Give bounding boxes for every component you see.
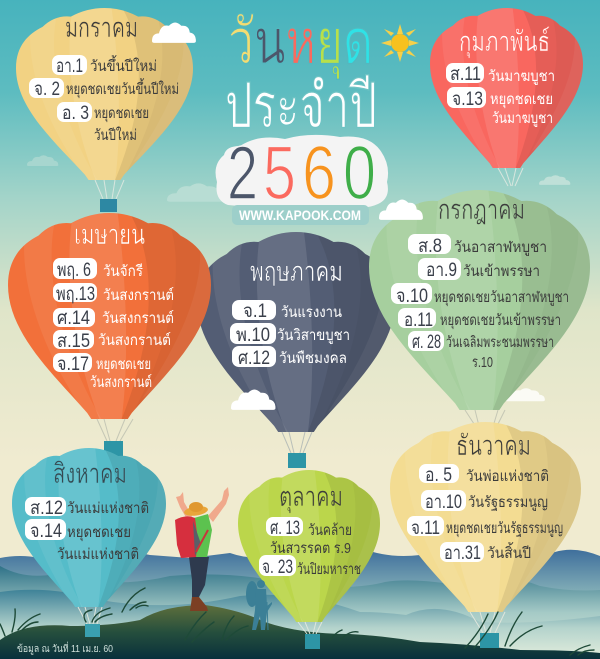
entry: 9 Jul: วันเข้าพรรษา	[463, 263, 540, 280]
ground hill	[0, 605, 600, 659]
entry: 15 Apr: วันสงกรานต์	[98, 332, 171, 349]
mountains	[0, 550, 600, 659]
entry: 10 May: วันวิสาขบูชา	[277, 327, 350, 344]
title	[216, 8, 419, 225]
entry: 8 Jul	[408, 234, 547, 257]
entry: 15 Apr: ส.15	[57, 331, 90, 352]
hat	[183, 505, 209, 517]
entry: 1 Jan: วันขึ้นปีใหม่	[90, 55, 157, 75]
entry: 8 Jul: ส.8	[418, 236, 442, 257]
entry: 1 May: วันแรงงาน	[281, 304, 342, 321]
entry: 11 Feb	[446, 63, 555, 85]
entry: 13 Oct: วันคล้าย	[308, 522, 352, 539]
year digits: 6	[302, 131, 336, 216]
entry: 31 Dec: อา.31	[444, 543, 481, 564]
entry: 13 Apr: พฤ.13	[56, 284, 95, 305]
entry: 13 Feb: หยุดชดเชย	[490, 91, 553, 109]
entry: 14 Aug: วันแม่แห่งชาติ	[57, 546, 139, 563]
entry: 14 Apr: ศ.14	[57, 308, 90, 329]
entry: 23 Oct	[259, 555, 361, 578]
entry: 13 Oct: วันสวรรคต ร.9	[270, 540, 351, 557]
year cloud	[216, 135, 388, 209]
entry: 17 Apr: วันสงกรานต์	[90, 374, 152, 391]
entry: 14 Aug: หยุดชดเชย	[67, 524, 131, 542]
entry: 10 May: พ.10	[236, 325, 270, 346]
heading: สิงหาคม	[53, 458, 127, 489]
heading: กรกฎาคม	[438, 194, 525, 225]
grass tufts	[0, 588, 594, 655]
entry: 3 Jan	[57, 102, 149, 144]
entry: 5 Dec: วันพ่อแห่งชาติ	[466, 468, 549, 485]
small hiker silhouette	[246, 580, 272, 630]
entry: 13 Apr	[53, 283, 174, 305]
ropes and basket	[282, 432, 312, 468]
ropes and basket	[78, 607, 102, 637]
balloon: May	[197, 232, 415, 468]
ropes	[465, 410, 505, 430]
balloon envelope	[238, 470, 394, 622]
heading: มกราคม	[65, 12, 138, 43]
entry: 9 Jul	[418, 258, 540, 281]
entry: 12 Aug: วันแม่แห่งชาติ	[67, 500, 149, 517]
entry: 9 Jul: อา.9	[426, 260, 457, 281]
title line 2: ประจำปี	[225, 72, 377, 141]
entry: 13 Feb: จ.13	[452, 89, 483, 110]
entry: 13 Apr: วันสงกรานต์	[103, 287, 174, 304]
entry: 11 Dec: จ.11	[411, 518, 440, 539]
entry: 17 Apr: จ.17	[57, 354, 89, 375]
balloon envelope	[16, 8, 211, 180]
ropes and basket	[470, 612, 505, 648]
entry: 11 Jul	[398, 308, 561, 331]
heading: พฤษภาคม	[250, 256, 343, 287]
entry: 10 May	[230, 323, 350, 346]
ropes and basket	[97, 419, 133, 456]
entry: 1 Jan: อา.1	[56, 56, 83, 77]
entry: 10 Jul: จ.10	[396, 286, 428, 307]
legs	[189, 557, 209, 597]
cloud: on May balloon	[231, 389, 275, 410]
cloud: top left	[152, 22, 196, 43]
entry: 28 Jul	[408, 331, 554, 371]
entry: 17 Apr: หยุดชดเชย	[96, 356, 151, 374]
entry: 28 Jul: ร.10	[472, 354, 493, 371]
heading: ตุลาคม	[279, 481, 343, 514]
entry: 6 Apr: พฤ. 6	[57, 260, 91, 281]
balloon: January	[16, 8, 211, 212]
entry: 3 Jan: หยุดชดเชย	[94, 105, 149, 123]
entry: 2 Jan: หยุดชดเชยวันขึ้นปีใหม่	[66, 78, 179, 99]
balloon: October	[238, 470, 394, 649]
website badge	[232, 205, 369, 225]
entry: 11 Feb: วันมาฆบูชา	[488, 68, 555, 85]
heading: กุมภาพันธ์	[459, 26, 550, 59]
website badge: WWW.KAPOOK.COM	[239, 208, 361, 223]
hiker figure	[175, 487, 229, 611]
icon: sun	[381, 24, 419, 62]
entry: 1 Jan	[52, 55, 157, 77]
balloon envelope	[197, 232, 415, 432]
ropes and basket	[95, 180, 124, 212]
entry: 14 Aug: จ.14	[30, 521, 62, 542]
entry: 6 Apr	[53, 258, 143, 281]
entry: 5 Dec: อ. 5	[425, 465, 452, 486]
entry: 3 Jan: อ. 3	[62, 103, 89, 124]
entry: 8 Jul: วันอาสาฬหบูชา	[454, 239, 547, 256]
balloon: April	[8, 213, 231, 456]
balloon envelope	[12, 448, 181, 607]
faint clouds	[27, 155, 570, 401]
ropes	[498, 168, 523, 186]
entry: 13 Feb	[447, 87, 553, 127]
boots	[190, 597, 208, 611]
entry: 12 Aug	[25, 497, 149, 519]
arms	[176, 487, 229, 522]
balloon envelope	[8, 213, 231, 419]
entry: 10 Dec	[421, 490, 548, 513]
ropes and basket	[298, 622, 322, 649]
entry: 31 Dec: วันสิ้นปี	[487, 542, 531, 562]
entry: 12 May	[232, 346, 347, 369]
entry: 11 Jul: อ.11	[404, 310, 433, 331]
year digits	[227, 131, 376, 216]
entry: 15 Apr	[53, 330, 171, 352]
entry: 6 Apr: วันจักรี	[103, 263, 143, 280]
source note: ข้อมูล ณ วันที่ 11 เม.ย. 60	[17, 641, 113, 655]
year digits: 2	[227, 131, 258, 216]
entry: 11 Jul: หยุดชดเชยวันเข้าพรรษา	[440, 312, 561, 330]
entry: 14 Aug	[25, 519, 139, 563]
cloud: July left	[379, 199, 423, 220]
balloon envelope	[369, 190, 600, 410]
entry: 5 Dec	[419, 464, 549, 486]
entry: 31 Dec	[440, 542, 531, 564]
entry: 11 Dec	[407, 516, 563, 539]
heading: ธันวาคม	[456, 430, 531, 461]
balloon: December	[390, 422, 600, 648]
balloon: August	[12, 448, 181, 637]
entry: 10 Jul	[391, 283, 569, 307]
entry: 13 Oct	[266, 517, 352, 557]
entry: 1 May	[232, 300, 342, 322]
balloon: July	[369, 190, 600, 430]
shirt	[192, 514, 212, 558]
year digits: 0	[343, 131, 376, 216]
balloon envelope	[390, 422, 600, 612]
entry: 13 Oct: ศ. 13	[270, 518, 300, 539]
entry: 23 Oct: วันปิยมหาราช	[297, 561, 361, 578]
backpack	[175, 516, 198, 558]
entry: 28 Jul: วันเฉลิมพระชนมพรรษา	[446, 334, 554, 351]
entry: 10 Dec: อา.10	[425, 492, 462, 513]
entry: 13 Feb: วันมาฆบูชา	[492, 110, 553, 127]
title line 1: วันหยุด	[228, 8, 373, 79]
entry: 12 May: ศ.12	[238, 348, 270, 369]
heading: เมษายน	[74, 219, 145, 250]
entry: 3 Jan: วันปีใหม่	[94, 126, 137, 144]
entry: 23 Oct: จ. 23	[262, 557, 293, 578]
entry: 17 Apr	[53, 353, 152, 391]
entry: 10 Dec: วันรัฐธรรมนูญ	[468, 494, 548, 511]
entry: 12 Aug: ส.12	[30, 498, 63, 519]
year digits: 5	[263, 131, 296, 216]
balloon: February	[430, 8, 598, 186]
entry: 12 May: วันพืชมงคล	[279, 350, 347, 367]
entry: 11 Feb: ส.11	[450, 64, 481, 85]
balloon envelope	[430, 8, 598, 168]
entry: 2 Jan	[29, 78, 179, 100]
entry: 2 Jan: จ. 2	[34, 79, 60, 100]
entry: 14 Apr: วันสงกรานต์	[102, 310, 174, 327]
entry: 1 May: จ.1	[243, 301, 267, 322]
entry: 28 Jul: ศ. 28	[412, 332, 441, 353]
entry: 14 Apr	[53, 308, 174, 329]
